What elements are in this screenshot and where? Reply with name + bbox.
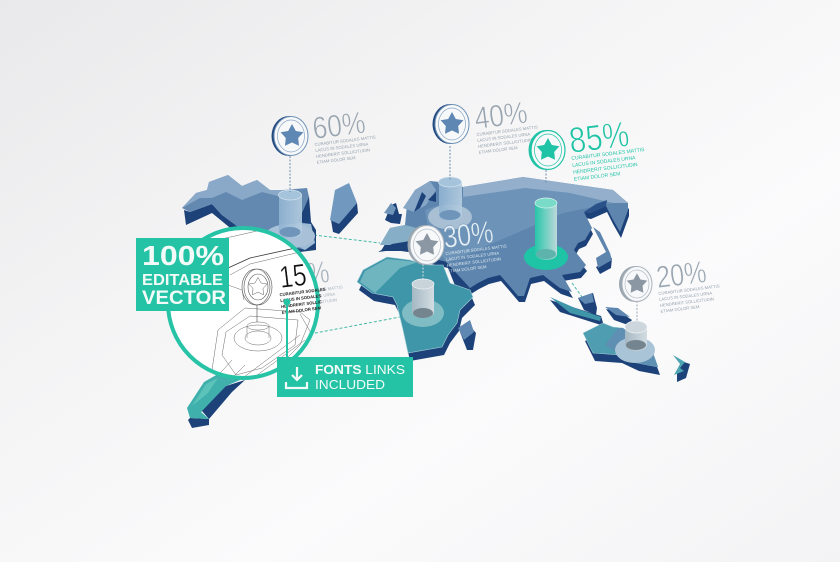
pin: 85% [528, 130, 565, 184]
map: greenland [330, 183, 358, 234]
callout: fonts links included [277, 357, 413, 397]
label: 60% [310, 104, 378, 165]
lens pin: wireframe star badge [242, 269, 272, 305]
map: africa [357, 257, 475, 361]
label: 85%: HENDRERIT SOLLICITUDIN [573, 162, 638, 176]
label behind lens: 15% overflow: CURABITUR SODALES MATTIS [281, 284, 343, 297]
label: 40%: ETIAM DOLOR SEM [478, 145, 518, 155]
label: 60%: 60% [310, 105, 367, 146]
label: 60%: LACUS IN SODALES URNA [315, 141, 369, 153]
callout: fonts links included: FONTS LINKS [315, 362, 405, 377]
red sea [447, 263, 470, 288]
callout: 100% editable vector: VECTOR [142, 288, 226, 309]
dashed connector lines [310, 235, 602, 334]
map: japan [593, 227, 612, 274]
label: 20%: ETIAM DOLOR SEM [660, 304, 700, 314]
bar: australia [615, 321, 655, 363]
label: 30%: CURABITUR SODALES MATTIS [445, 243, 507, 256]
lens label: 15%: ETIAM DOLOR SEM [281, 305, 322, 315]
label: 60%: ETIAM DOLOR SEM [316, 155, 356, 165]
label: 30%: HENDRERIT SOLLICITUDIN [447, 256, 501, 268]
bar: north america [265, 190, 315, 248]
mediterranean [378, 241, 420, 252]
bar: europe [428, 177, 472, 230]
lens label: 15%: CURABITUR SODALES [279, 287, 326, 297]
label: 85%: ETIAM DOLOR SEM [574, 171, 621, 183]
callout: 100% editable vector: 100% [142, 240, 224, 271]
bar: africa [402, 279, 444, 327]
callout: 100% editable vector [136, 238, 229, 311]
leader line with dot [284, 298, 290, 358]
map: madagascar [458, 320, 476, 350]
callout: 100% editable vector: EDITABLE [142, 272, 223, 289]
label: 30%: 30% [441, 214, 495, 255]
label: 20%: HENDRERIT SOLLICITUDIN [660, 296, 714, 308]
label behind lens: 15% overflow: HENDRERIT SOLLICITUDIN [283, 297, 337, 309]
label: 40%: CURABITUR SODALES MATTIS [476, 124, 538, 137]
label: 20%: 20% [654, 254, 708, 295]
label: 20%: LACUS IN SODALES URNA [659, 290, 713, 302]
label: 85%: 85% [567, 113, 631, 161]
bar: asia [524, 198, 568, 270]
label behind lens: 15% overflow: LACUS IN SODALES URNA [282, 291, 336, 303]
label: 40%: 40% [472, 95, 529, 136]
label behind lens: 15% overflow: 15% [277, 254, 331, 295]
label: 60%: CURABITUR SODALES MATTIS [314, 134, 376, 147]
map: indonesia [550, 293, 632, 326]
map: eurasia [378, 177, 629, 302]
east asia seas [584, 200, 607, 213]
callout: fonts links included: INCLUDED [315, 377, 385, 392]
map: north america [182, 175, 316, 252]
lens label: 15%: HENDRERIT SOLLIC [281, 299, 322, 309]
pin: 20% [619, 266, 652, 322]
label: 40%: LACUS IN SODALES URNA [477, 131, 531, 143]
label: 30%: ETIAM DOLOR SEM [447, 264, 487, 274]
scandinavia [403, 181, 436, 212]
europe pale coast [380, 225, 432, 258]
label: 20%: CURABITUR SODALES MATTIS [658, 283, 720, 296]
label: 85%: CURABITUR SODALES MATTIS [571, 147, 645, 162]
label: 85% [567, 111, 648, 183]
map: south america [187, 370, 250, 428]
map: new zealand [673, 355, 690, 382]
label: 30%: LACUS IN SODALES URNA [446, 250, 500, 262]
map: australia [583, 323, 660, 375]
pin: 30% [408, 225, 444, 282]
label: 85%: LACUS IN SODALES URNA [572, 155, 637, 169]
label: 40% [472, 94, 540, 155]
lens label: 15%: LACUS IN SODALES [280, 293, 322, 303]
pin: 40% [432, 104, 469, 180]
magnifier lens: wireframe view [166, 226, 320, 380]
label: 40%: HENDRERIT SOLLICITUDIN [478, 137, 532, 149]
label: 20% [654, 253, 722, 314]
lens label: 15% [275, 255, 328, 315]
icon: download [286, 367, 307, 388]
map: british isles [384, 203, 402, 224]
label: 30% [441, 213, 509, 274]
pin: 60% [272, 116, 308, 192]
lens label: 15%: 15 [277, 257, 308, 295]
label: 60%: HENDRERIT SOLLICITUDIN [316, 147, 370, 159]
